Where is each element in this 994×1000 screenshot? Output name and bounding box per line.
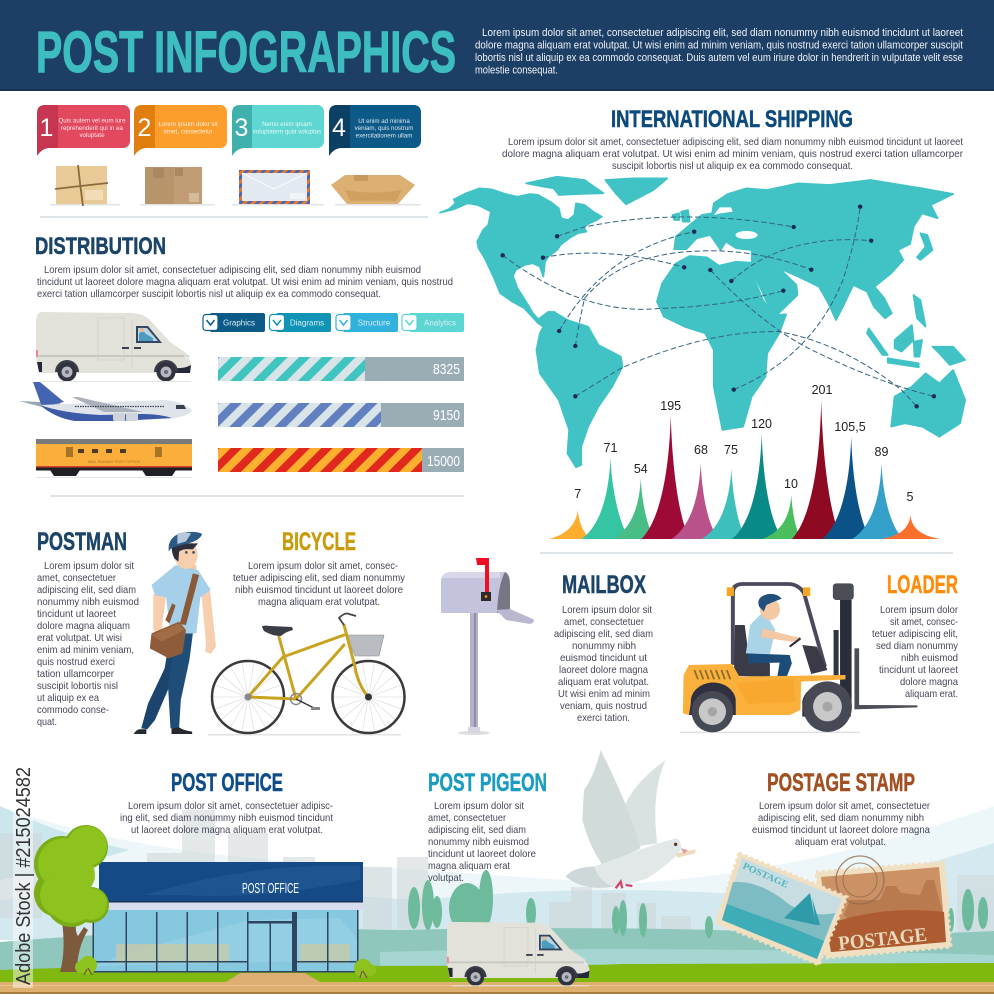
international shipping paragraph (502, 136, 963, 172)
bar: 8325 (218, 357, 464, 381)
card 2 (134, 105, 227, 156)
spike chart: 120 (751, 417, 772, 431)
heading: postage stamp: POSTAGE STAMP (767, 769, 915, 797)
postman paragraph: nonummy nibh euismod (37, 596, 139, 608)
distribution paragraph: exerci tation ullamcorper suscipit lobortis nisl ut aliquip ex ea commodo consequat. (37, 288, 381, 300)
bar: 15000 (218, 448, 464, 472)
post office paragraph: ut laoreet dolore magna aliquam erat volutpat. (131, 824, 323, 836)
bicycle paragraph: tetuer adipiscing elit, sed diam nonummy (233, 572, 406, 584)
heading: loader: LOADER (887, 571, 958, 599)
loader paragraph: nibh euismod (901, 652, 958, 664)
bicycle paragraph: Lorem ipsum dolor sit amet, consec- (248, 560, 398, 572)
mailbox illustration (441, 558, 534, 735)
spike chart: 195 (660, 399, 681, 413)
postman paragraph: tation ullamcorper (37, 668, 114, 680)
tab: graphics (203, 313, 265, 332)
card 2: amet, consectetur (163, 128, 213, 136)
loader paragraph (872, 604, 959, 700)
postman paragraph: enim ad minim veniam, (37, 644, 134, 656)
heading: distribution: DISTRIBUTION (35, 233, 166, 260)
brown postage stamp (816, 856, 951, 958)
card 3 (232, 105, 324, 156)
card 3: Nemo enim ipsam (262, 121, 312, 128)
post pigeon paragraph: magna aliquam erat (428, 860, 510, 872)
bar: 9150: 9150 (433, 407, 460, 424)
postage stamp paragraph (752, 800, 930, 848)
card 2: 2 (138, 114, 151, 142)
spike chart: 75 (724, 443, 738, 457)
postage stamp paragraph: Lorem ipsum dolor sit amet, consectetuer (759, 800, 930, 812)
icon: paper bag parcel (331, 175, 421, 206)
bar: 9150 (218, 403, 464, 427)
card 4: veniam, quis nostrum (355, 125, 413, 132)
icon: airplane (19, 382, 192, 421)
loader paragraph: tetuer adipiscing elit, (872, 628, 958, 640)
post office paragraph: Lorem ipsum dolor sit amet, consectetuer adipisc- (128, 800, 333, 812)
postman paragraph: ut aliquip ex ea (37, 692, 99, 704)
tab: analytics (402, 313, 464, 332)
spike chart: 7 (574, 487, 581, 501)
main title: POST INFOGRAPHICS (36, 20, 456, 85)
delivery van on road (447, 922, 590, 986)
loader paragraph: aliquam erat. (905, 688, 958, 700)
post pigeon paragraph (428, 800, 536, 884)
pigeon illustration (566, 750, 696, 888)
bicycle paragraph: magna aliquam erat volutpat. (258, 596, 380, 608)
post pigeon paragraph: adipiscing elit, sed diam (428, 824, 526, 836)
icon: airmail envelope (232, 170, 324, 206)
spike chart: 54 (634, 462, 648, 476)
spike chart: 105,5 (834, 420, 866, 434)
post pigeon paragraph: tincidunt ut laoreet dolore (428, 848, 536, 860)
header paragraph: molestie consequat. (475, 64, 558, 76)
card 4 (329, 105, 421, 156)
icon: mail train car: MAIL RAILWAY POST OFFICE (88, 460, 141, 464)
mailbox paragraph: euismod tincidunt ut (560, 652, 647, 664)
post office building (92, 862, 364, 972)
doormat path (226, 973, 320, 982)
post pigeon paragraph: volutpat. (428, 872, 464, 884)
blue postage stamp (716, 853, 847, 965)
world map with routes (440, 177, 965, 467)
postage stamp paragraph: aliquam erat volutpat. (795, 836, 886, 848)
tab: diagrams (270, 313, 331, 332)
postman paragraph (37, 560, 139, 728)
tab: diagrams: Diagrams (290, 318, 324, 328)
loader paragraph: sed diam nonummy (876, 640, 959, 652)
heading: international shipping: INTERNATIONAL SHIPPING (611, 106, 853, 133)
distribution paragraph (37, 264, 453, 300)
post pigeon paragraph: amet, consectetuer (428, 812, 506, 824)
postman paragraph: commodo conse- (37, 704, 109, 716)
bar: 15000: 15000 (427, 453, 460, 470)
card 1: voluptate (79, 132, 105, 139)
numbered cards (37, 105, 421, 156)
mailbox paragraph: Lorem ipsum dolor sit (562, 604, 652, 616)
heading: postman: POSTMAN (37, 528, 127, 556)
postman paragraph: quis nostrud exerci (37, 656, 115, 668)
card 2: Lorem ipsum dolor sit (158, 121, 218, 128)
postman paragraph: adipiscing elit, sed diam (37, 584, 136, 596)
background landscape scene (0, 806, 994, 994)
mailbox paragraph: veniam, quis nostrud (560, 700, 647, 712)
spike chart: 10 (784, 477, 798, 491)
mailbox paragraph (554, 604, 653, 724)
icon: delivery van (36, 312, 191, 382)
post office sign: POST OFFICE (242, 880, 299, 897)
spike chart (548, 383, 940, 539)
spike chart: 68 (694, 443, 708, 457)
bicycle illustration (208, 614, 404, 736)
loader paragraph: dolore magna (900, 676, 958, 688)
heading: post pigeon: POST PIGEON (428, 769, 547, 797)
postman paragraph: erat volutpat. Ut wisi (37, 632, 122, 644)
postman paragraph: Lorem ipsum dolor sit (44, 560, 134, 572)
card 1 (37, 105, 130, 156)
postman paragraph: dolore magna aliquam (37, 620, 130, 632)
forklift loader illustration (680, 583, 917, 733)
mailbox paragraph: amet, consectetuer (564, 616, 644, 628)
postman paragraph: suscipit lobortis nisl (37, 680, 118, 692)
mailbox paragraph: nonummy nibh (572, 640, 636, 652)
loader paragraph: Lorem ipsum dolor (880, 604, 958, 616)
tree and bushes (34, 825, 376, 978)
tab: structure (336, 313, 398, 332)
card 3: 3 (235, 114, 248, 142)
mailbox paragraph: exerci tation. (577, 712, 630, 724)
post pigeon paragraph: Lorem ipsum dolor sit (434, 800, 524, 812)
bar: 8325: 8325 (433, 361, 460, 378)
card 1: Quis autem vel eum iure (58, 118, 126, 124)
distribution paragraph: tincidunt ut laoreet dolore magna aliquam erat volutpat. Ut wisi enim ad minim veniam, quis nostrud (37, 276, 453, 288)
stamp label: POSTAGE (741, 862, 790, 891)
bicycle paragraph (233, 560, 406, 608)
header paragraph (475, 27, 963, 76)
post office paragraph (120, 800, 333, 836)
postman paragraph: amet, consectetuer (37, 572, 116, 584)
tab: analytics: Analytics (424, 318, 456, 328)
tab: structure: Structure (358, 318, 391, 328)
spike chart: 71 (604, 441, 617, 455)
heading: bicycle: BICYCLE (282, 528, 356, 556)
postman paragraph: tincidunt ut laoreet (37, 608, 116, 620)
postage stamp paragraph: adipiscing elit, sed diam nonummy nibh (758, 812, 924, 824)
icon: mail train car (36, 439, 192, 478)
card 1: reprehenderit qui in ea (61, 125, 124, 132)
header band (0, 0, 994, 91)
post office paragraph: ing elit, sed diam nonummy nibh euismod tincidunt (120, 812, 333, 824)
heading: post office: POST OFFICE (171, 769, 283, 797)
card 3: voluptatem quia voluptas (253, 128, 321, 136)
card 1: 1 (40, 114, 53, 142)
mailbox paragraph: laoreet dolore magna (559, 664, 648, 676)
mailbox paragraph: Ut wisi enim ad minim (558, 688, 650, 700)
distribution paragraph: Lorem ipsum dolor sit amet, consectetuer adipiscing elit, sed diam nonummy nibh euismod (44, 264, 421, 276)
heading: mailbox: MAILBOX (562, 571, 646, 599)
spike chart: 201 (812, 383, 832, 397)
loader paragraph: tincidunt ut laoreet (879, 664, 958, 676)
header paragraph: Lorem ipsum dolor sit amet, consectetuer adipiscing elit, sed diam nonummy nibh euismod tincidunt ut laoreet (482, 27, 963, 39)
card 4: 4 (332, 114, 346, 142)
international shipping paragraph: suscipit lobortis nisl ut aliquip ex ea commodo consequat. (612, 160, 853, 172)
icon: wrapped parcel (50, 165, 120, 206)
loader paragraph: sit amet, consec- (890, 616, 958, 628)
spike chart: 5 (907, 490, 914, 504)
tab: graphics: Graphics (223, 318, 255, 328)
stamp label: POSTAGE (837, 924, 928, 955)
stock id vertical text: Adobe Stock | #215024582 (13, 767, 35, 985)
icon: cardboard box (140, 167, 215, 206)
spike chart: 89 (875, 445, 888, 459)
postage stamp paragraph: euismod tincidunt ut laoreet dolore magna (752, 824, 930, 836)
mailbox paragraph: adipiscing elit, sed diam (554, 628, 653, 640)
card 4: Ut enim ad minima (358, 118, 410, 125)
bicycle paragraph: nibh euismod tincidunt ut laoreet dolore (235, 584, 403, 596)
international shipping paragraph: dolore magna aliquam erat volutpat. Ut wisi enim ad minim veniam, quis nostrud exerci tation ullamcorper (502, 148, 963, 160)
post pigeon paragraph: nonummy nibh euismod (428, 836, 529, 848)
card 4: exercitationem ullam (356, 132, 412, 140)
postman paragraph: quat. (37, 716, 57, 728)
postman figure (134, 532, 216, 734)
mailbox paragraph: aliquam erat volutpat. (558, 676, 649, 688)
